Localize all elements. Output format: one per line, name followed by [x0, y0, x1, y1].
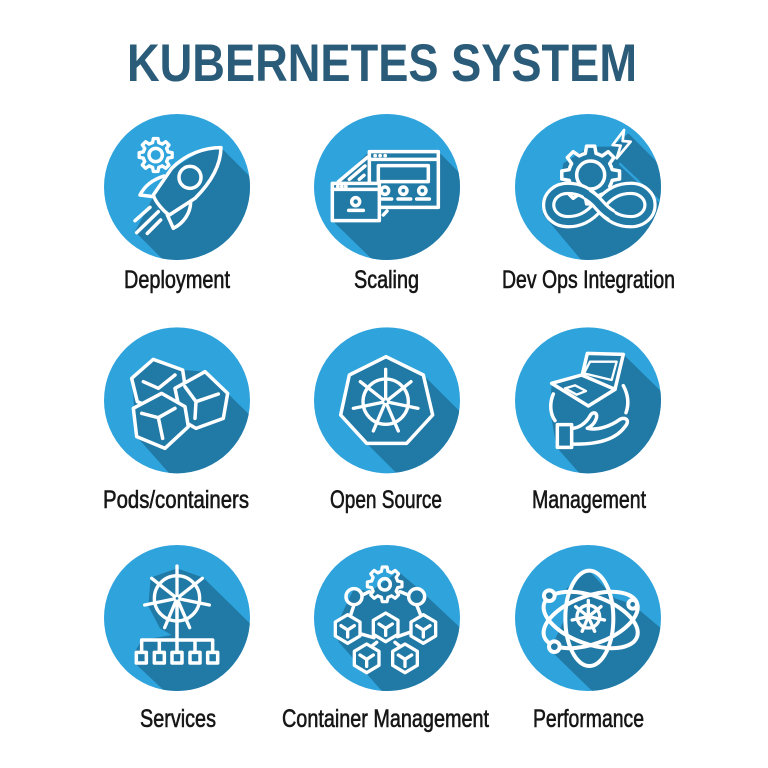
panel: dev ops integration	[502, 114, 678, 294]
label: Container Management: Container Management	[282, 705, 489, 733]
panel: container management	[282, 545, 489, 733]
icon: hand holding laptop	[515, 327, 661, 474]
icon: wheel with network tree	[104, 545, 250, 691]
icon: rocket and gear	[104, 114, 250, 260]
panel: performance	[515, 545, 661, 728]
icon: gear, infinity and bolt	[515, 114, 661, 260]
panel: management	[515, 327, 673, 514]
icon: gear and connected cubes	[314, 545, 460, 691]
panel: scaling	[314, 114, 460, 294]
icon: heptagon ship wheel	[314, 327, 460, 474]
panel: services	[104, 545, 257, 733]
label: Management: Management	[532, 486, 646, 514]
icon: atom with wheel	[515, 545, 661, 691]
label: Services: Services	[140, 705, 216, 733]
label: Pods/containers: Pods/containers	[103, 486, 249, 514]
icon: browser windows	[314, 114, 460, 260]
label: Scaling: Scaling	[354, 266, 419, 294]
label: Dev Ops Integration: Dev Ops Integration	[502, 266, 675, 294]
label: Deployment: Deployment	[124, 266, 230, 294]
label: Open Source: Open Source	[330, 486, 442, 514]
panel: deployment	[104, 114, 250, 294]
icon: three cubes	[104, 327, 250, 474]
infographic canvas	[104, 44, 674, 732]
panel: pods/containers	[104, 327, 250, 508]
title: KUBERNETES SYSTEM	[127, 34, 637, 93]
panel: open source	[314, 327, 473, 514]
label: Performance: Performance	[533, 705, 644, 733]
